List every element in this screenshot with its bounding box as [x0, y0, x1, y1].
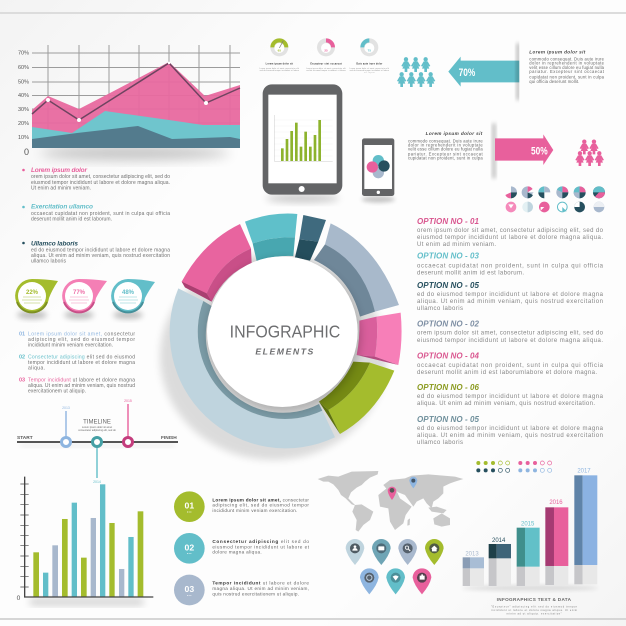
- start and finish labels: START: [17, 435, 33, 441]
- item: Ullamco laboris: ullamco laboris: [31, 258, 66, 264]
- phone venn circles: [367, 155, 390, 178]
- item: Lorem ipsum dolor: [22, 167, 170, 192]
- text 01: incididunt minim veniam exercitation.: [212, 508, 297, 513]
- circle 03: [174, 575, 205, 605]
- arrow: 70%: [448, 57, 520, 87]
- item: Exercitation ullamco: deserunt mollit anim id est laborum.: [31, 216, 112, 222]
- option 05 dark: OPTION NO - 05: [417, 281, 480, 290]
- chart caption: incididunt ut labore et dolore magna aliqua. Ut enim: [491, 609, 577, 612]
- gauge captions: [260, 63, 390, 74]
- gauge captions: aliqua: [364, 72, 374, 74]
- card: top right text: pariatur. Excepteur sint occaecat: [529, 69, 605, 74]
- timeline title: [78, 420, 116, 432]
- text 01: [212, 497, 309, 513]
- gauges: [260, 38, 390, 74]
- bar 2014: 2014: [492, 538, 506, 544]
- bars: [33, 484, 143, 597]
- text 01: Lorem ipsum dolor sit amet, consectetur: [212, 497, 309, 502]
- item 03: exercitationem ut aliquip.: [28, 388, 86, 394]
- item 03: [19, 378, 135, 394]
- numbered list: [19, 332, 135, 394]
- text 02: dolore magna aliqua.: [212, 550, 262, 555]
- arrow: 50%: [495, 134, 553, 165]
- bar 2016: 2016: [549, 500, 563, 506]
- bar 2017: [574, 468, 597, 584]
- option 05 grey: aliqua. Ut enim ad minim veniam, quis nostrud exercitation: [417, 433, 603, 439]
- card: middle text: pariatur. Excepteur sint occaecat: [408, 151, 483, 156]
- card: top right text: qui officia deserunt mollit.: [529, 79, 579, 84]
- card: top right text: dolor in reprehenderit in voluptate: [529, 61, 605, 66]
- item: Lorem ipsum dolor: Lorem ipsum dolor: [31, 167, 87, 174]
- option 06: OPTION NO - 06: [417, 383, 480, 392]
- card: top right text: commodo consequat. Duis aute irure: [529, 57, 605, 62]
- bar 2014: [489, 538, 511, 586]
- zero label: 0: [17, 595, 21, 602]
- gauge pink: 25: [324, 49, 328, 53]
- item 02: aliqua.: [28, 366, 45, 372]
- item 02: tempor incididunt ut labore et dolore magna: [28, 360, 135, 366]
- option 06: aliqua. Ut enim ad minim veniam, quis nostrud exercitation.: [417, 401, 595, 407]
- axis labels: 30%: [18, 107, 29, 113]
- bar chart: [17, 477, 153, 605]
- chart grid: [32, 45, 240, 148]
- text 03: [212, 581, 309, 596]
- segment: green: [319, 362, 394, 434]
- icon: pink people: [575, 139, 604, 166]
- option 03: [417, 252, 604, 276]
- axis labels: 0: [24, 147, 29, 157]
- bar 2015: 2015: [521, 522, 535, 528]
- option 05 grey: ed do eiusmod tempor incididunt ut labore et dolore magna: [417, 426, 604, 432]
- phone: [362, 138, 395, 203]
- item: Ullamco laboris: Ullamco laboris: [31, 240, 78, 248]
- card: middle text: commodo consequat. Duis aute irure: [408, 138, 483, 143]
- item: Ullamco laboris: [22, 240, 170, 264]
- segment: teal: [245, 214, 297, 261]
- option 03: deserunt mollit anim id est laborum.: [417, 270, 524, 276]
- item: Lorem ipsum dolor: Ut enim ad minim veniam.: [31, 186, 91, 192]
- milestone 2014: 2014: [93, 480, 101, 484]
- bar 2013: 2013: [465, 551, 479, 557]
- item 03: Tempor incididunt ut labore et dolore magna: [28, 378, 135, 384]
- text 02: Consectetur adipiscing elit sed do: [212, 539, 309, 544]
- card: middle text: [408, 123, 496, 178]
- timeline title: Lorem ipsum dolor sit amet: [82, 426, 112, 429]
- timeline title: TIMELINE: [83, 420, 111, 426]
- tablet: [263, 84, 342, 202]
- item: Exercitation ullamco: [22, 204, 170, 222]
- card: middle text: cupidatat non proident, sunt in culpa: [408, 156, 483, 161]
- text 02: eiusmod tempor incididunt ut labore et: [212, 544, 310, 549]
- axis labels: 20%: [18, 121, 29, 127]
- chart caption: minim ad ut aliquip. exercitation": [507, 612, 562, 615]
- donut chart: [160, 214, 402, 460]
- option 02: OPTION NO - 02: [417, 320, 480, 328]
- gauge captions: Duis aute irure dolor: [356, 63, 382, 66]
- world map: [318, 471, 463, 532]
- card: middle text: Lorem ipsum dolor sit: [426, 131, 483, 136]
- start and finish labels: [17, 435, 177, 441]
- item: Ullamco laboris: ed do eiusmod tempor incididunt ut labore et dolore magna: [31, 248, 170, 254]
- axis labels: [18, 50, 29, 157]
- circle 01: [174, 491, 205, 522]
- item: Lorem ipsum dolor: eiusmod tempor incididunt ut labore et dolore magna aliqua.: [31, 180, 170, 186]
- pie row one: [505, 186, 605, 198]
- timeline: [17, 399, 178, 484]
- milestone 2014: [92, 438, 102, 484]
- start and finish labels: FINISH: [161, 435, 177, 441]
- card: top right text: [517, 37, 626, 103]
- pink area: [32, 62, 240, 148]
- pin: user: [346, 539, 364, 565]
- option 05 dark: [417, 281, 604, 312]
- option 03: occaecat cupidatat non proident, sunt in culpa qui officia: [417, 263, 604, 269]
- bar 2016: [545, 500, 568, 585]
- text 02: [212, 539, 310, 555]
- axis labels: 50%: [18, 80, 29, 86]
- gauge captions: sed do eiusmod tempor incididunt ut labore: [306, 69, 346, 72]
- center title: INFOGRAPHIC: [230, 322, 340, 342]
- trend line: [32, 63, 240, 120]
- milestone 2015: 2015: [124, 399, 132, 403]
- item 03: aliqua. Ut enim ad minim veniam, quis nostrud: [28, 383, 135, 389]
- option 06: [417, 383, 604, 407]
- gauge teal: 75: [368, 49, 371, 53]
- data points: [46, 62, 208, 122]
- option 05 dark: aliqua. Ut enim ad minim veniam, quis nostrud exercitation: [417, 299, 603, 305]
- bar 2017: 2017: [577, 468, 591, 474]
- axis labels: 40%: [18, 93, 29, 99]
- chart caption: [491, 597, 577, 615]
- arrow: 70%: 70%: [459, 67, 476, 79]
- bullet list: [22, 167, 170, 264]
- option 02: eiusmod tempor incididunt ut labore et dolore magna aliqua.: [417, 338, 603, 344]
- pin: gear: [360, 568, 379, 594]
- gauge captions: sed do eiusmod tempor incididunt ut labore: [350, 69, 389, 72]
- gauge captions: Lorem ipsum dolor sit: [266, 63, 293, 66]
- teal drop: 48%: [122, 290, 135, 296]
- text 03: quis nostrud exercitationem ut aliquip.: [212, 591, 299, 596]
- segment: navy: [295, 215, 326, 261]
- teal area: [32, 111, 240, 148]
- option 05 dark: ullamco laboris: [417, 306, 463, 312]
- 3D bar chart: [462, 461, 598, 615]
- dark area: [32, 126, 240, 148]
- item: Exercitation ullamco: Exercitation ullamco: [31, 204, 93, 210]
- segment: pink right: [357, 313, 402, 365]
- option 04: [417, 352, 604, 376]
- card: top right text: cupidatat non proident, sunt in culpa: [529, 75, 605, 80]
- gauge green: 65: [278, 49, 281, 53]
- text 03: Tempor incididunt ut labore et dolore: [212, 581, 309, 586]
- circle 02: [174, 533, 205, 564]
- item: Lorem ipsum dolor: orem ipsum dolor sit amet, consectetur adipiscing elit, sed do: [31, 174, 170, 180]
- segment: pink left: [182, 224, 252, 302]
- milestone 2013: [62, 406, 70, 446]
- option 04: deserunt mollit anim id est laborumlabore et dolore magna.: [417, 370, 597, 376]
- legend dots: [476, 461, 552, 472]
- item 02: [19, 354, 135, 372]
- pin: wifi: [386, 568, 405, 594]
- options list: [417, 217, 604, 446]
- arrow: 50%: 50%: [531, 145, 548, 157]
- option 01: eiusmod tempor incididunt ut labore et dolore magna aliqua.: [417, 235, 603, 241]
- text 03: magna aliqua. Ut enim ad minim veniam,: [212, 586, 309, 591]
- item 01: [19, 332, 135, 348]
- gauge captions: Lorem ipsum dolor sit amet consectetur elit: [306, 67, 346, 70]
- card: top right text: Lorem ipsum dolor sit: [529, 49, 586, 54]
- center circle: [207, 256, 361, 412]
- option 05 dark: ed do eiusmod tempor incididunt ut labore et dolore magna: [417, 292, 604, 298]
- segment: grey blue: [314, 223, 399, 317]
- pin: home: [425, 539, 444, 565]
- item 02: Consectetur adipiscing elit sed do eiusmod: [28, 354, 135, 360]
- axis labels: 10%: [18, 135, 29, 141]
- item 01: Lorem ipsum dolor sit amet, consectetur: [28, 332, 135, 338]
- option 02: [417, 320, 604, 344]
- card: middle text: velit esse cillum dolore eu fugiat nulla: [408, 147, 483, 152]
- pink drop: 77%: [73, 290, 86, 296]
- chart caption: INFOGRAPHICS TEXT & DATA: [497, 597, 572, 602]
- item: Exercitation ullamco: occaecat cupidatat non proident, sunt in culpa qui officia: [31, 211, 170, 217]
- axis labels: 60%: [18, 65, 29, 71]
- item 02: 02: [19, 354, 25, 360]
- green drop: 22%: [26, 290, 39, 296]
- item 01: adipiscing elit, sed do eiusmod tempor: [28, 337, 135, 343]
- bar 2015: [517, 522, 540, 586]
- item 01: 01: [19, 332, 25, 338]
- chart caption: "Excepteur" adipiscing elit sed do eiusmod tempor: [491, 606, 577, 609]
- card: middle text: dolor in reprehenderit in voluptate: [408, 142, 483, 147]
- continents: [318, 471, 463, 532]
- gauge captions: Lorem ipsum dolor sit amet consectetur elit: [260, 67, 300, 70]
- option 06: ed do eiusmod tempor incididunt ut labore et dolore magna: [417, 394, 604, 400]
- bar 2013: [463, 551, 484, 586]
- option 01: orem ipsum dolor sit amet, consectetur adipiscing elit, sed do: [417, 228, 604, 234]
- milestone 2015: [124, 399, 132, 446]
- top right section: [260, 37, 626, 212]
- numbered circles: [174, 491, 444, 605]
- circle 03: 03: [185, 584, 194, 594]
- pin: mail: [372, 539, 391, 565]
- option 04: OPTION NO - 04: [417, 352, 480, 360]
- gauge captions: Excepteur sint occaecat: [310, 63, 342, 66]
- gauge captions: sed do eiusmod tempor incididunt ut labore: [260, 69, 299, 72]
- gauge captions: Lorem ipsum dolor sit amet consectetur elit: [350, 67, 390, 70]
- small pie charts: [505, 186, 605, 212]
- percent drops: [15, 279, 155, 319]
- pin: search: [398, 539, 417, 565]
- icon: teal people: [397, 57, 435, 87]
- option 02: orem ipsum dolor sit amet, consectetur adipiscing elit, sed do: [417, 331, 604, 337]
- tablet bar chart: [274, 115, 333, 161]
- pin: puzzle: [413, 568, 431, 594]
- option 01: OPTION NO - 01: [417, 217, 480, 226]
- item: Ullamco laboris: aliqua. Ut enim ad minim veniam, quis nostrud exercitation: [31, 253, 170, 259]
- item 03: 03: [19, 378, 25, 384]
- option 01: Ut enim ad minim veniam.: [417, 242, 496, 248]
- area chart: [18, 45, 240, 160]
- card: top right text: velit esse cillum dolore eu fugiat nulla: [529, 65, 605, 70]
- segment: large light blue: [170, 288, 335, 448]
- circle 02: 02: [185, 542, 194, 552]
- text 01: adipiscing elit, sed do eiusmod tempor: [212, 503, 309, 508]
- axis labels: 70%: [18, 50, 29, 56]
- option 05 grey: ullamco laboris: [417, 440, 463, 446]
- center subtitle: ELEMENTS: [255, 346, 314, 356]
- option 04: occaecat cupidatat non proident, sunt in culpa qui officia: [417, 363, 604, 369]
- pie row two: [506, 202, 604, 212]
- location pins: [346, 539, 444, 594]
- option 05 grey: [417, 415, 604, 446]
- map pins: [388, 477, 417, 500]
- milestone 2013: 2013: [62, 406, 70, 410]
- axes: [20, 477, 153, 597]
- item 01: incididunt minim veniam exercitation.: [28, 342, 113, 348]
- circle 01: 01: [185, 501, 194, 511]
- timeline title: consectetur adipiscing elit, sed do: [78, 429, 116, 432]
- option 01: [417, 217, 604, 248]
- option 03: OPTION NO - 03: [417, 252, 480, 260]
- option 05 grey: OPTION NO - 05: [417, 415, 480, 424]
